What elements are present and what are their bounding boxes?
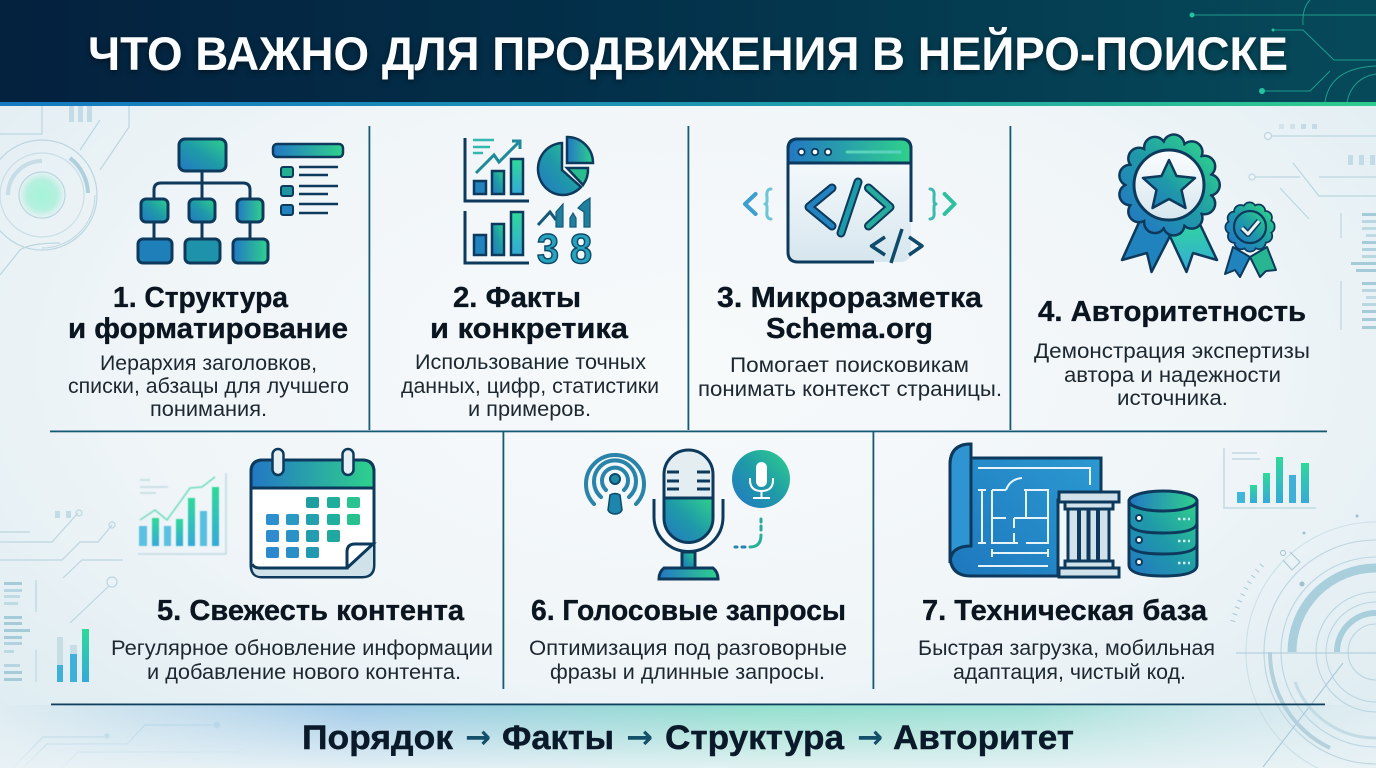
description 3 xyxy=(698,354,1002,401)
icon: microphone xyxy=(654,450,723,579)
description 4: источника. xyxy=(1117,387,1228,410)
title: ЧТО ВАЖНО ДЛЯ ПРОДВИЖЕНИЯ В НЕЙРО-ПОИСКЕ xyxy=(88,27,1288,80)
description 4 xyxy=(1034,340,1310,410)
description 4: Демонстрация экспертизы xyxy=(1034,340,1310,363)
description 1: Иерархия заголовков, xyxy=(100,352,317,375)
icon: award rosettes xyxy=(1122,143,1276,277)
description 7: Быстрая загрузка, мобильная xyxy=(918,637,1215,660)
header banner xyxy=(0,0,1376,106)
description 1: списки, абзацы для лучшего xyxy=(68,375,349,398)
description 2: данных, цифр, статистики xyxy=(401,375,659,398)
description 6 xyxy=(529,637,847,684)
icon: charts, pie and numbers xyxy=(465,137,593,272)
description 1 xyxy=(68,352,349,421)
description 7: адаптация, чистый код. xyxy=(953,661,1186,684)
icon: code window xyxy=(745,139,955,263)
panel: 7 technical base xyxy=(918,444,1316,684)
numbers 3 8: 3 8 xyxy=(537,225,592,272)
heading 3 xyxy=(717,282,983,345)
arrow 1: → xyxy=(465,718,491,756)
heading 5: 5. Свежесть контента xyxy=(157,595,465,627)
heading 2 xyxy=(430,282,629,345)
heading 1: и форматирование xyxy=(68,313,348,345)
icon: voice circle xyxy=(732,450,790,547)
panel: 3 schema.org markup xyxy=(698,139,1002,401)
icon: small bar chart xyxy=(1224,448,1316,508)
heading 7: 7. Техническая база xyxy=(922,595,1208,627)
panel: 2 facts and specifics xyxy=(401,137,659,421)
description 3: понимать контекст страницы. xyxy=(698,378,1002,401)
bottom summary line: Структура xyxy=(665,719,845,757)
description 2: Использование точных xyxy=(415,351,647,374)
heading 4: 4. Авторитетность xyxy=(1038,296,1306,328)
icon: growth chart xyxy=(138,473,226,554)
bottom summary line xyxy=(302,718,1074,757)
description 6: фразы и длинные запросы. xyxy=(550,661,825,684)
icon: broadcast person xyxy=(586,455,644,514)
heading 3: 3. Микроразметка xyxy=(717,282,983,314)
bottom band background xyxy=(0,705,1376,768)
icon: database xyxy=(1129,491,1197,576)
description 3: Помогает поисковикам xyxy=(730,354,969,377)
description 2 xyxy=(401,351,659,421)
description 6: Оптимизация под разговорные xyxy=(529,637,847,660)
heading 2: 2. Факты xyxy=(453,282,581,314)
panel: 1 structure and formatting xyxy=(68,139,349,421)
heading 1 xyxy=(68,282,348,345)
heading 6: 6. Голосовые запросы xyxy=(531,595,846,627)
bottom summary line: Факты xyxy=(502,719,614,757)
icon: blueprint xyxy=(950,444,1101,576)
bottom summary line: Авторитет xyxy=(893,719,1074,757)
description 5 xyxy=(111,637,493,684)
panel: 4 authority xyxy=(1034,143,1310,410)
panel: 5 content freshness xyxy=(111,449,493,684)
description 5: Регулярное обновление информации xyxy=(111,637,493,660)
heading 2: и конкретика xyxy=(430,313,629,345)
arrow 2: → xyxy=(626,718,653,756)
panel: 6 voice search xyxy=(529,450,847,684)
description 2: и примеров. xyxy=(468,398,591,421)
description 4: автора и надежности xyxy=(1064,364,1281,387)
heading 1: 1. Структура xyxy=(113,282,289,314)
icon: calendar xyxy=(251,449,374,577)
icon: column xyxy=(1059,492,1119,577)
description 1: понимания. xyxy=(150,398,267,421)
icon: hierarchy tree and list xyxy=(138,139,343,263)
description 7 xyxy=(918,637,1215,684)
description 5: и добавление нового контента. xyxy=(147,661,461,684)
heading 3: Schema.org xyxy=(766,313,933,345)
bottom summary line: Порядок xyxy=(302,719,454,757)
arrow 3: → xyxy=(857,718,883,756)
